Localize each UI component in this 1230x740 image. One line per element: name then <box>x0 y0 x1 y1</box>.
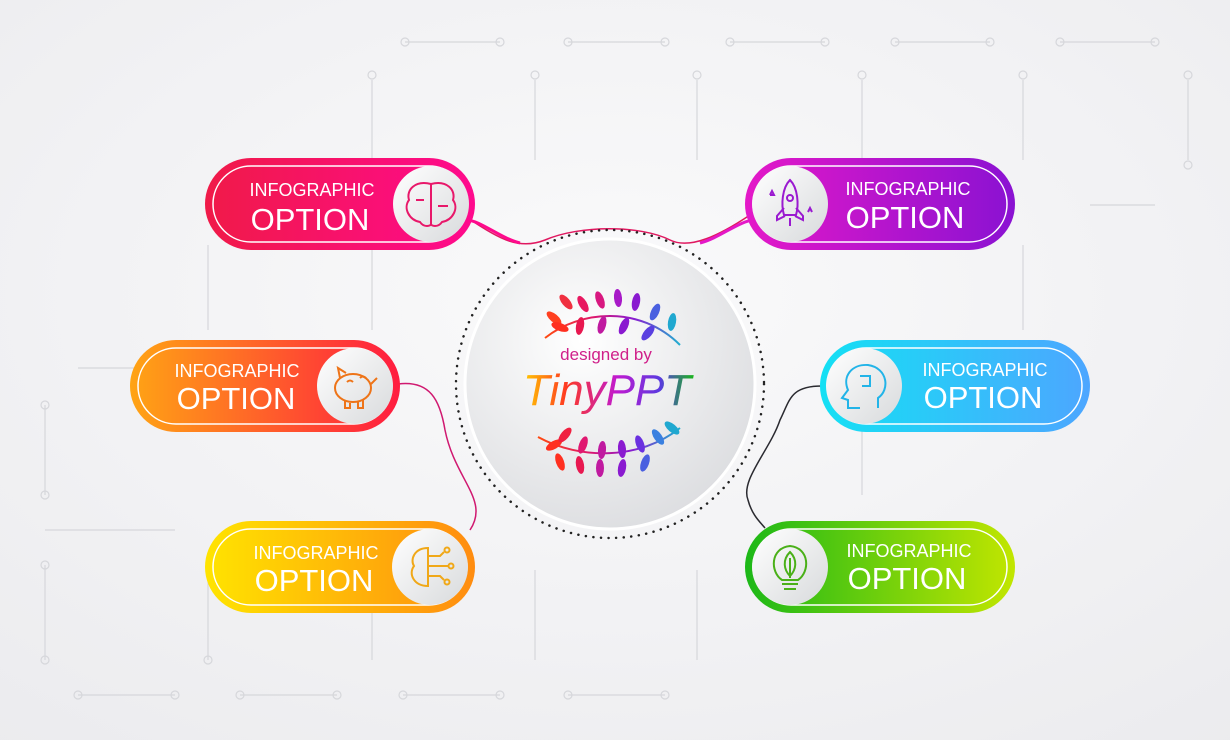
icon: rocket <box>770 180 812 226</box>
logo: leaves top <box>538 316 680 453</box>
pill 3: middle left: OPTION <box>177 381 295 416</box>
pill 4: middle right: INFOGRAPHIC <box>922 360 1048 380</box>
icon: bulb leaf <box>774 546 806 589</box>
pill 1: top left <box>205 158 520 250</box>
connector lines <box>398 215 822 530</box>
icon: head puzzle <box>842 365 885 408</box>
icon: brain circuit <box>412 548 454 586</box>
pill 5: bottom left: OPTION <box>255 563 373 598</box>
pill 4: middle right: OPTION <box>924 380 1042 415</box>
pill 6: bottom right: OPTION <box>848 561 966 596</box>
pill 3: middle left <box>130 340 400 432</box>
pill 6: bottom right: INFOGRAPHIC <box>846 541 972 561</box>
logo text: designed by <box>560 345 652 364</box>
pill 1: top left: INFOGRAPHIC <box>249 180 375 200</box>
pill 2: top right: OPTION <box>846 200 964 235</box>
pill 3: middle left: INFOGRAPHIC <box>174 361 300 381</box>
pill 2: top right <box>700 158 1015 250</box>
pill 5: bottom left: INFOGRAPHIC <box>253 543 379 563</box>
icon: piggy bank <box>335 368 377 408</box>
center circle <box>456 230 764 538</box>
pill 1: top left: OPTION <box>251 202 369 237</box>
pill 5: bottom left <box>205 521 475 613</box>
center circle: TinyPPT <box>523 366 694 415</box>
pill 2: top right: INFOGRAPHIC <box>845 179 971 199</box>
pill 6: bottom right <box>745 521 1015 613</box>
pill 4: middle right <box>820 340 1090 432</box>
icon: brain <box>407 183 455 226</box>
